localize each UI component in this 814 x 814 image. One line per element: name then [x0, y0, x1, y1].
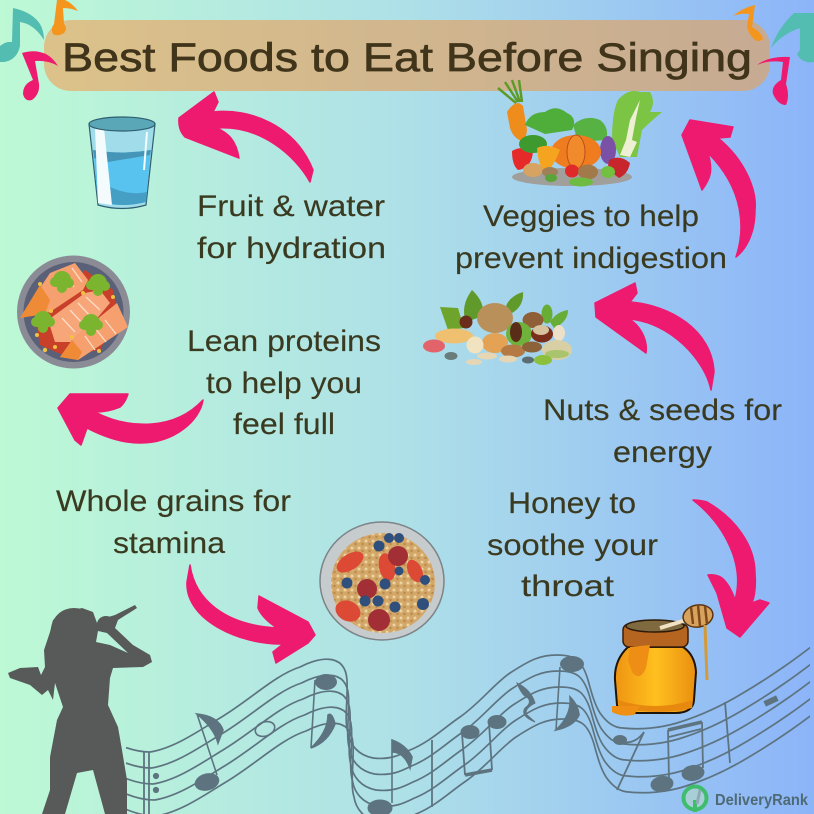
icon: oatmeal bowl [320, 522, 444, 640]
icon: music notes right [733, 5, 814, 105]
text: veggies: prevent indigestion [455, 242, 727, 275]
text: whole grains: stamina [113, 527, 225, 560]
text: veggies: Veggies to help [483, 200, 699, 233]
text: lean proteins: feel full [233, 408, 335, 441]
text: lean proteins: to help you [206, 367, 362, 400]
text: honey: throat [521, 570, 615, 603]
text: fruit and water: for hydration [197, 232, 386, 265]
icon: glass of water [89, 117, 155, 208]
arrow: to salmon [58, 394, 203, 445]
text: whole grains [56, 485, 291, 560]
text: fruit and water: Fruit & water [197, 190, 385, 223]
text: veggies [455, 200, 727, 275]
icon: music notes left [0, 0, 78, 100]
logo: DeliveryRank: DeliveryRank [715, 792, 808, 809]
text: honey [487, 487, 658, 603]
singer silhouette [8, 605, 152, 814]
text: nuts and seeds: Nuts & seeds for [543, 394, 782, 427]
text: lean proteins: Lean proteins [187, 325, 381, 358]
logo: DeliveryRank [684, 786, 808, 812]
arrow: to oatmeal [187, 565, 315, 663]
icon: salmon plate [17, 256, 130, 368]
arrow: to honey [693, 500, 769, 637]
title: Best Foods to Eat Before Singing [62, 36, 752, 80]
text: whole grains: Whole grains for [56, 485, 291, 518]
icon: vegetables [498, 80, 662, 186]
text: lean proteins [187, 325, 381, 441]
arrow: to nuts [595, 283, 714, 390]
title banner [44, 20, 770, 91]
sheet music staff [126, 646, 810, 814]
icon: honey jar [612, 603, 715, 716]
arrow: to veggies [682, 120, 755, 257]
arrow: to water [179, 92, 313, 182]
text: nuts and seeds: energy [613, 436, 712, 469]
text: honey: Honey to [508, 487, 636, 520]
text: nuts and seeds [543, 394, 782, 469]
text: fruit and water [197, 190, 386, 265]
text: honey: soothe your [487, 529, 658, 562]
icon: nuts and seeds [423, 290, 572, 365]
